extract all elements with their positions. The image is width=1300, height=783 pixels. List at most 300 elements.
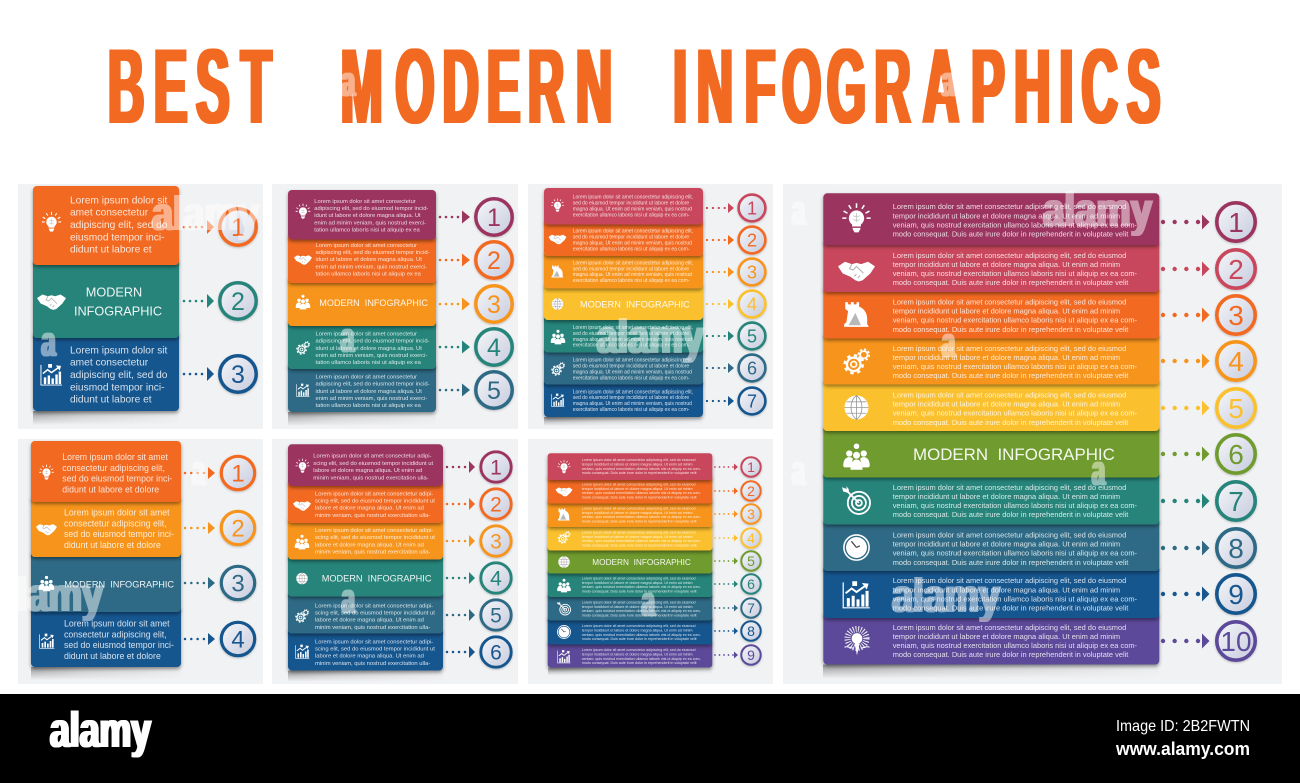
number: 3	[487, 291, 501, 319]
watermarks: alamy	[0, 569, 103, 622]
number	[481, 489, 511, 519]
number	[221, 511, 255, 545]
text block: veniam, quis nostrud exercitation ullamco laboris nisi ut aliquip ex ea com-	[893, 316, 1138, 325]
number	[739, 323, 765, 349]
heading: MODERN INFOGRAPHIC	[913, 445, 1115, 464]
text block: Lorem ipsum dolor sit amet consectetur adipiscing elit, sed do eiusmod	[893, 390, 1126, 400]
text block: Lorem ipsum dolor sit amet consectetur adipi-	[315, 528, 433, 534]
number	[1217, 575, 1255, 613]
text block: sed do eiusmod tempor incididunt ut labore et dolore	[573, 331, 689, 337]
watermarks	[0, 57, 1152, 626]
text block: modo consequat. Duis aute irure dolor in reprehenderit in voluptate velit	[582, 519, 697, 523]
text block: tempor incididunt ut labore et dolore magna aliqua. Ut enim ad minim	[582, 652, 693, 656]
step 3	[33, 332, 256, 411]
bar	[288, 234, 436, 283]
number: 5	[747, 553, 755, 569]
website: www.alamy.com	[1115, 739, 1250, 759]
number: 6	[747, 358, 757, 378]
step 6	[288, 628, 511, 670]
panel: 10 steps	[783, 184, 1282, 684]
number	[221, 456, 255, 490]
number	[221, 566, 255, 600]
number	[481, 452, 511, 482]
arrow	[715, 534, 738, 542]
arrow	[715, 652, 738, 658]
number: 10	[1220, 626, 1252, 657]
icon: chess	[844, 302, 869, 327]
arrow	[1163, 586, 1210, 602]
panel: 3 steps	[18, 184, 263, 429]
number	[1217, 482, 1255, 520]
arrow	[447, 609, 475, 621]
text block: Lorem ipsum dolor sit amet consectetur adipiscing elit, sed do eiusmod	[893, 344, 1126, 353]
text block: veniam, quis nostrud exercitation ullamco laboris nisi ut aliquip ex ea com-	[582, 609, 702, 613]
arrow	[184, 367, 214, 381]
panel: 6 steps	[272, 439, 518, 684]
arrow	[707, 299, 734, 309]
bar	[31, 606, 181, 667]
text block: consectetur adipiscing elit,	[62, 463, 165, 473]
watermarks: a	[642, 577, 655, 626]
icon: target	[842, 486, 870, 514]
stack shadow	[288, 412, 425, 425]
number: 5	[747, 326, 757, 346]
text block: veniam, quis nostrud exercitation ullamco laboris nisi ut aliquip ex ea com-	[582, 539, 702, 543]
text block: Lorem ipsum dolor sit amet consectetur adipiscing elit, sed do eiusmod	[893, 576, 1126, 585]
number	[476, 199, 512, 235]
step 1	[288, 190, 512, 240]
text block: tempor incididunt ut labore et dolore magna aliqua. Ut enim ad minim	[893, 211, 1120, 220]
text block: Lorem ipsum dolor sit amet consectetur adipiscing elit, sed do eiusmod	[582, 576, 696, 580]
bar	[823, 425, 1159, 478]
watermarks: alamy	[597, 311, 704, 364]
text block: magna aliqua. Ut enim ad minim veniam, quis nostrud	[573, 337, 692, 343]
text block: idunt ut labore et dolore magna aliqua. Ut	[314, 213, 421, 219]
icon: bulb	[39, 465, 54, 480]
panel: 7 steps	[528, 184, 773, 429]
text block: modo consequat. Duis aute irure dolor in reprehenderit in voluptate velit	[582, 637, 697, 641]
step 5	[548, 546, 761, 574]
bar	[823, 193, 1159, 245]
text block: sed do eiusmod tempor incididunt ut labore et dolore	[573, 395, 689, 401]
number	[1217, 203, 1255, 241]
step 6	[544, 347, 765, 384]
text block: consectetur adipiscing elit,	[64, 518, 167, 528]
icon: handshake	[556, 487, 572, 497]
text block: scing elit, sed do eiusmod tempor incididunt ut	[313, 461, 434, 467]
text block: idunt ut labore et dolore magna aliqua. Ut	[316, 346, 422, 352]
text block: adipiscing elit, sed do eiusmod tempor incid-	[316, 339, 430, 345]
text block: modo consequat. Duis aute irure dolor in reprehenderit in voluptate velit	[893, 278, 1129, 287]
icon: gears	[558, 532, 570, 543]
number: 4	[747, 294, 757, 314]
text block: veniam, quis nostrud exercitation ullamco laboris nisi ut aliquip ex ea com-	[582, 515, 702, 519]
icon: people	[39, 576, 54, 591]
arrow	[1163, 214, 1210, 230]
number: 6	[1228, 439, 1244, 470]
number	[739, 259, 765, 285]
heading: INFOGRAPHIC	[74, 304, 162, 318]
bar	[823, 286, 1159, 338]
text block: labore et dolore magna aliqua. Ut enim ad	[315, 542, 424, 548]
number: 1	[490, 456, 502, 480]
bar	[548, 592, 712, 620]
text block: Lorem ipsum dolor sit amet consectetur adipiscing elit, sed do eiusmod	[893, 483, 1126, 492]
bar	[823, 565, 1159, 618]
watermarks: a	[42, 317, 56, 366]
arrow	[707, 331, 734, 341]
text block: Lorem ipsum dolor sit amet	[64, 508, 170, 518]
text block: didunt ut labore et	[70, 245, 152, 256]
number: 2	[747, 483, 755, 499]
icon: sun and arrow	[844, 629, 870, 655]
number	[739, 355, 765, 381]
text block: Lorem ipsum dolor sit amet consectetur adipiscing elit, sed do eiusmod	[582, 458, 696, 462]
arrow	[715, 580, 738, 588]
arrow	[440, 340, 470, 354]
number	[741, 598, 761, 618]
text block: tempor incididunt ut labore et dolore magna aliqua. Ut enim ad minim	[582, 628, 693, 632]
panel: 9 steps	[528, 439, 773, 684]
number	[481, 600, 511, 630]
number: 3	[490, 530, 502, 554]
text block: labore et dolore magna aliqua. Ut enim ad	[315, 618, 424, 624]
number	[476, 286, 512, 322]
image id: Image ID: 2B2FWTN	[1116, 718, 1250, 735]
text block: sed do eiusmod tempor incididunt ut labore et dolore	[573, 201, 689, 207]
text block: magna aliqua. Ut enim ad minim veniam, quis nostrud	[573, 369, 692, 375]
number	[220, 356, 256, 392]
text block: Lorem ipsum dolor sit amet consectetur adipiscing elit,	[573, 195, 693, 201]
step 1	[548, 453, 761, 480]
text block: enim ad minim veniam, quis nostrud exerci-	[316, 353, 427, 359]
watermarks: a	[942, 318, 955, 367]
text block: sed do eiusmod tempor incididunt ut labore et dolore	[573, 364, 689, 370]
bar	[288, 444, 443, 486]
panel background	[272, 439, 518, 684]
text block: modo consequat. Duis aute irure dolor in reprehenderit in voluptate velit	[893, 604, 1129, 612]
text block: enim ad minim veniam, quis nostrud exerci-	[316, 396, 427, 402]
text block: tempor incididunt ut labore et dolore magna aliqua. Ut enim ad minim	[893, 260, 1120, 269]
watermarks: a	[1092, 446, 1105, 495]
step 2	[288, 480, 511, 523]
arrow	[440, 254, 470, 266]
panel background	[18, 439, 263, 684]
arrow	[715, 464, 738, 470]
arrow	[185, 467, 215, 479]
number	[739, 291, 765, 317]
step 9	[823, 565, 1255, 618]
bar	[544, 219, 703, 256]
text block: adipiscing elit, sed do eiusmod tempor incid-	[314, 206, 428, 212]
watermarks: a	[341, 57, 355, 106]
icon: chess	[552, 266, 563, 277]
step 3	[544, 251, 765, 288]
arrow	[447, 461, 475, 473]
text block: Lorem ipsum dolor sit amet consectetur adipiscing elit, sed do eiusmod	[893, 530, 1126, 540]
number	[1217, 342, 1255, 380]
text block: magna aliqua. Ut enim ad minim veniam, quis nostrud	[573, 401, 692, 407]
number: 1	[747, 459, 755, 475]
text block: Lorem ipsum dolor sit amet consectetur adipiscing elit,	[573, 229, 693, 235]
bar	[288, 363, 436, 412]
step 1	[31, 441, 255, 502]
arrow	[440, 298, 470, 310]
icon: people	[557, 579, 571, 592]
text block: sed do eiusmod tempor inci-	[64, 640, 174, 650]
bar	[544, 347, 703, 384]
number	[739, 227, 765, 253]
step 6	[548, 569, 761, 597]
arrow	[1163, 400, 1210, 416]
arrow	[707, 203, 734, 213]
icon: gears	[296, 610, 309, 622]
number: 1	[1228, 207, 1244, 238]
number: 7	[1228, 486, 1244, 517]
step 4	[31, 606, 255, 667]
step 8	[823, 518, 1255, 571]
text block: Lorem ipsum dolor sit amet consectetur adipiscing elit, sed do eiusmod	[582, 506, 696, 510]
number: 4	[487, 334, 501, 362]
bar	[548, 522, 712, 550]
bar	[544, 251, 703, 288]
number: 4	[1228, 346, 1244, 377]
text block: modo consequat. Duis aute irure dolor in reprehenderit in voluptate velit	[582, 589, 697, 593]
text block: tempor incididunt ut labore et dolore magna aliqua. Ut enim ad minim	[582, 462, 693, 466]
text block: veniam, quis nostrud exercitation ullamco laboris nisi ut aliquip ex ea com-	[893, 269, 1138, 278]
panel: 4 steps	[18, 439, 263, 684]
text block: minim veniam, quis nostrud exercitation ulla-	[315, 625, 430, 631]
text block: tempor incididunt ut labore et dolore magna aliqua. Ut enim ad minim	[893, 353, 1120, 362]
icon: bulb	[558, 460, 570, 473]
icon: clock	[844, 535, 869, 560]
number: 4	[490, 568, 502, 590]
text block: didunt ut labore et	[70, 395, 152, 406]
number	[741, 481, 761, 501]
icon: gears	[552, 363, 565, 375]
text block: magna aliqua. Ut enim ad minim veniam, quis nostrud	[573, 206, 692, 212]
text block: minim veniam, quis nostrud exercitation ulla-	[315, 661, 430, 667]
icon: handshake	[36, 524, 57, 535]
text block: veniam, quis nostrud exercitation ullamco laboris nisi ut aliquip ex ea com-	[893, 641, 1138, 650]
arrow	[1163, 494, 1210, 508]
bar	[288, 320, 436, 369]
step 1	[544, 188, 765, 224]
number	[220, 283, 256, 319]
text block: tempor incididunt ut labore et dolore magna aliqua. Ut enim ad minim	[582, 487, 693, 491]
text block: tempor incididunt ut labore et dolore magna aliqua. Ut enim ad minim	[893, 585, 1120, 594]
text block: veniam, quis nostrud exercitation ullamco laboris nisi ut aliquip ex ea com-	[582, 657, 702, 661]
number: 5	[490, 604, 502, 628]
bar	[31, 551, 181, 612]
icon: bulb	[42, 212, 61, 232]
text block: Lorem ipsum dolor sit	[70, 345, 167, 356]
bar	[823, 471, 1159, 524]
text block: minim veniam, quis nostrud exercitation ulla-	[315, 513, 430, 519]
text block: veniam, quis nostrud exercitation ullamco laboris nisi ut aliquip ex ea com-	[893, 220, 1138, 229]
title: BEST	[108, 26, 272, 146]
bar	[823, 378, 1159, 431]
bar	[544, 315, 703, 352]
text block: tempor incididunt ut labore et dolore magna aliqua. Ut enim ad minim	[893, 632, 1120, 641]
text block: didunt ut labore et dolore	[64, 651, 161, 661]
text block: tempor incididunt ut labore et dolore magna aliqua. Ut enim ad minim	[582, 511, 693, 515]
text block: tation ullamco laboris nisi ut aliquip ex ea	[316, 360, 422, 366]
icon: people	[295, 535, 309, 549]
step 4	[288, 554, 511, 596]
text block: Lorem ipsum dolor sit amet consectetur adipiscing elit,	[573, 389, 693, 395]
arrow	[184, 220, 214, 234]
text block: modo consequat. Duis aute irure dolor in reprehenderit in voluptate velit	[893, 371, 1129, 380]
number: 2	[487, 247, 501, 275]
stack shadow	[31, 667, 170, 679]
icon: gears	[845, 349, 869, 373]
bar	[288, 554, 443, 596]
number	[739, 388, 765, 414]
text block: exercitation ullamco laboris nisi ut aliquip ex ea com-	[573, 375, 690, 381]
text block: sed do eiusmod tempor inci-	[62, 474, 172, 484]
icon: clock	[557, 625, 571, 639]
number: 1	[487, 204, 501, 232]
number: 2	[747, 230, 757, 250]
step 1	[288, 444, 511, 486]
panel: 5 steps	[272, 184, 518, 429]
text block: tempor incididunt ut labore et dolore magna aliqua. Ut enim ad minim	[582, 581, 693, 585]
step 10	[823, 612, 1255, 664]
step 2	[544, 219, 765, 256]
text block: tation ullamco laboris nisi ut aliquip ex ea	[316, 403, 422, 409]
number	[481, 526, 511, 556]
step 3	[288, 277, 512, 326]
number: 1	[747, 198, 757, 218]
panel background	[528, 184, 773, 429]
icon: chart	[296, 645, 309, 658]
text block: modo consequat. Duis aute irure dolor in reprehenderit in voluptate velit	[582, 613, 697, 617]
text block: minim veniam, quis nostrud exercitation ulla-	[315, 550, 430, 556]
text block: modo consequat. Duis aute irure dolor in reprehenderit in voluptate velit	[893, 325, 1129, 334]
text block: Lorem ipsum dolor sit amet consectetur	[314, 199, 416, 205]
number	[220, 209, 256, 245]
text block: Lorem ipsum dolor sit amet	[64, 619, 170, 629]
number: 3	[231, 571, 245, 598]
title	[108, 26, 1160, 146]
text block: exercitation ullamco laboris nisi ut aliquip ex ea com-	[573, 407, 690, 413]
icon: globe	[296, 573, 308, 584]
text block: didunt ut labore et dolore	[62, 484, 159, 494]
text block: Lorem ipsum dolor sit amet consectetur	[316, 375, 417, 381]
text block: veniam, quis nostrud exercitation ullamco laboris nisi ut aliquip ex ea com-	[893, 594, 1138, 603]
number	[741, 551, 761, 571]
text block: tempor incididunt ut labore et dolore magna aliqua. Ut enim ad minim	[582, 605, 693, 609]
step 5	[544, 315, 765, 352]
text block: exercitation ullamco laboris nisi ut aliquip ex ea com-	[573, 212, 690, 218]
text block: adipiscing elit, sed do eiusmod tempor incid-	[316, 382, 430, 388]
number	[1217, 296, 1255, 334]
step 5	[288, 363, 512, 412]
icon: handshake	[294, 255, 312, 265]
icon: gears	[297, 342, 310, 354]
watermarks: a	[941, 57, 955, 106]
text block: adipiscing elit, sed do	[70, 220, 168, 231]
bar	[31, 441, 181, 502]
text block: didunt ut labore et dolore	[64, 540, 161, 550]
step 6	[823, 425, 1255, 478]
icon: people	[551, 330, 565, 344]
text block: Lorem ipsum dolor sit amet consectetur adipiscing elit, sed do eiusmod	[582, 482, 696, 486]
text block: Lorem ipsum dolor sit amet consectetur adipiscing elit, sed do eiusmod	[582, 624, 696, 628]
arrow	[1163, 446, 1210, 462]
stack shadow	[33, 411, 168, 424]
text block: scing elit, sed do eiusmod tempor incididunt ut	[315, 646, 435, 652]
step 2	[548, 475, 761, 504]
number	[1217, 529, 1255, 567]
heading: MODERN	[86, 286, 142, 300]
title: INFOGRAPHICS	[673, 26, 1160, 146]
arrow	[185, 577, 215, 589]
text block: enim ad minim veniam, quis nostrud exerci-	[316, 264, 427, 270]
number: 4	[231, 627, 245, 654]
number: 5	[487, 377, 501, 405]
icon: people	[843, 443, 870, 470]
watermarks: alamy	[892, 570, 1000, 623]
number: 1	[231, 214, 245, 242]
text block: Lorem ipsum dolor sit amet consectetur adipiscing elit, sed do eiusmod	[582, 648, 696, 652]
step 3	[823, 286, 1255, 338]
text block: Lorem ipsum dolor sit amet consectetur adipiscing elit,	[573, 325, 693, 331]
number: 8	[1228, 533, 1244, 564]
number: 7	[747, 392, 757, 412]
icon: handshake	[548, 235, 566, 244]
stack shadow	[288, 670, 429, 680]
text block: tempor incididunt ut labore et dolore magna aliqua. Ut enim ad minim	[893, 307, 1120, 316]
icon: bulb	[296, 204, 310, 219]
text block: sed do eiusmod tempor incididunt ut labore et dolore	[573, 235, 689, 241]
bar	[823, 332, 1159, 384]
step 1	[33, 186, 256, 265]
text block: scing elit, sed do eiusmod tempor incididunt ut	[315, 535, 435, 541]
text block: Lorem ipsum dolor sit amet	[62, 452, 168, 462]
step 4	[823, 332, 1255, 384]
text block: adipiscing elit, sed do eiusmod tempor incid-	[316, 250, 430, 256]
text block: modo consequat. Duis aute irure dolor in reprehenderit in voluptate velit	[893, 650, 1129, 659]
arrow	[1163, 262, 1210, 276]
text block: Lorem ipsum dolor sit amet consectetur adipiscing elit,	[573, 260, 693, 266]
bar	[288, 518, 443, 560]
icon: chart	[40, 634, 54, 648]
arrow	[707, 235, 734, 245]
icon: globe	[845, 396, 868, 419]
step 2	[33, 259, 256, 338]
text block: modo consequat. Duis aute irure dolor in reprehenderit in voluptate velit	[582, 471, 697, 475]
bar	[288, 277, 436, 326]
number: 2	[1228, 254, 1244, 285]
arrow	[707, 363, 734, 373]
number	[741, 574, 761, 594]
arrow	[715, 628, 738, 634]
arrow	[440, 384, 470, 396]
watermarks: a	[192, 446, 205, 495]
step 2	[288, 234, 512, 283]
arrow	[184, 294, 214, 308]
text block: labore et dolore magna aliqua. Ut enim ad	[315, 654, 424, 660]
heading: MODERN INFOGRAPHIC	[592, 558, 691, 567]
text block: Lorem ipsum dolor sit	[70, 195, 167, 206]
footer band	[0, 694, 1300, 783]
text block: scing elit, sed do eiusmod tempor incididunt ut	[315, 498, 435, 504]
watermarks: a	[342, 574, 355, 623]
step 7	[548, 592, 761, 620]
text block: modo consequat. Duis aute irure dolor in reprehenderit in voluptate velit	[582, 495, 697, 499]
